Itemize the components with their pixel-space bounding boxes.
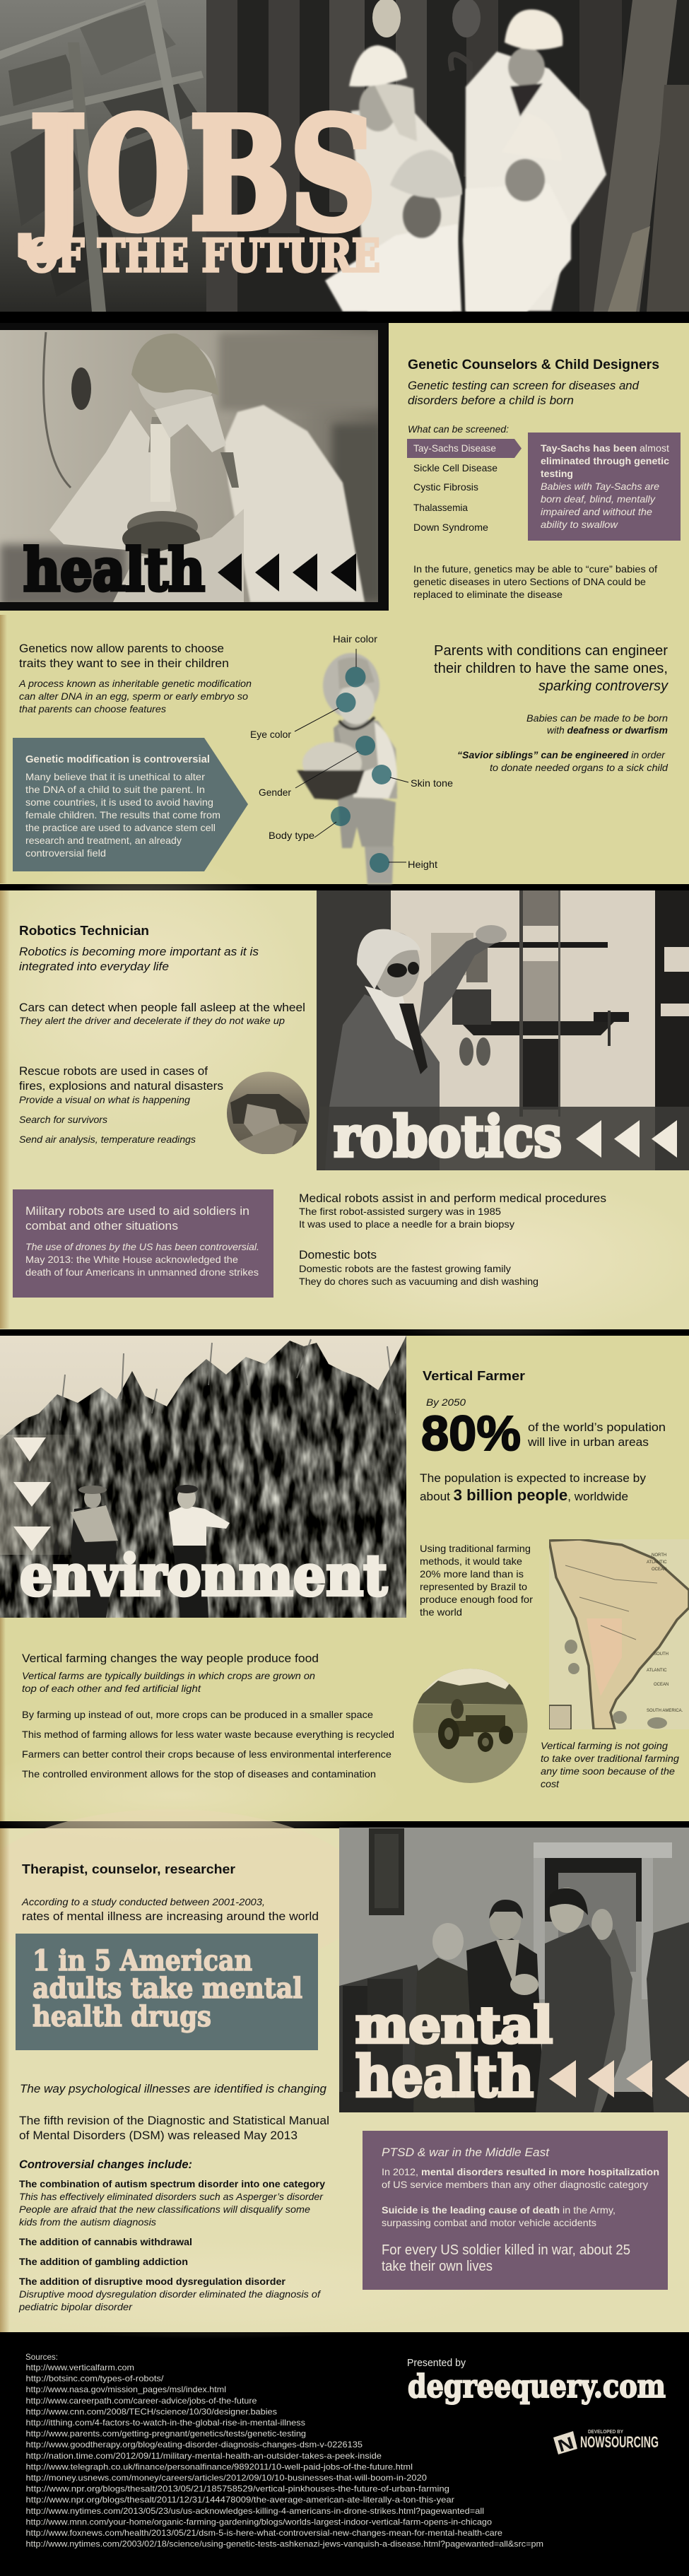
text block: cars: Cars can detect when people fall asleep at the wheel [19, 1001, 305, 1014]
trait labels [250, 633, 453, 870]
logo: nowsourcing [553, 2428, 659, 2457]
panel: PTSD and war: PTSD & war in the Middle East [382, 2146, 550, 2159]
text block: DSM changes: pediatric bipolar disorder [18, 2301, 133, 2312]
icon: N badge: N [555, 2433, 576, 2457]
text block: vertical farming changes: By farming up instead of out, more crops can be produced in a smaller space [22, 1709, 373, 1720]
text block: DSM changes: of Mental Disorders (DSM) was released May 2013 [19, 2129, 298, 2142]
map: south america [549, 1539, 689, 1729]
text block: traditional farming: methods, it would take [420, 1555, 522, 1567]
panel: tay-sachs callout: testing [541, 468, 573, 479]
text block: medical and domestic robots: Medical robots assist in and perform medical procedures [299, 1192, 606, 1205]
man front right [461, 158, 572, 312]
stat: 80 percent: of the world’s population [528, 1421, 666, 1434]
panel: 1 in 5 stat: adults take mental [33, 1972, 302, 2005]
text block: DSM changes: This has effectively eliminated disorders such as Asperger’s disorder [19, 2191, 324, 2202]
text block: choose traits: A process known as inheritable genetic modification [18, 678, 252, 689]
text block: DSM changes: The addition of disruptive mood dysregulation disorder [19, 2276, 286, 2287]
list: screened diseases [407, 439, 522, 533]
panel: military robots: The use of drones by the US has been controversial. [25, 1241, 259, 1252]
man front left [325, 150, 462, 312]
sources list: http://itthing.com/4-factors-to-watch-in-the-global-rise-in-mental-illness [25, 2418, 305, 2428]
panel: PTSD and war: For every US soldier killed in war, about 25 [382, 2242, 630, 2258]
text block: traditional farming [420, 1543, 533, 1618]
sources list: http://www.foxnews.com/health/2013/05/21/dsm-5-is-here-what-controversial-new-changes-mean-for-mental-health-care [25, 2528, 502, 2538]
text block: genetic counselors [408, 358, 659, 435]
sources list: http://www.verticalfarm.com [25, 2363, 134, 2372]
panel: genetic modification is controversial: Many believe that it is unethical to alter [25, 771, 205, 782]
paper: section backgrounds [0, 323, 689, 2339]
text block: DSM changes: Disruptive mood dysregulation disorder eliminated the diagnosis of [19, 2288, 322, 2300]
text block: rescue robots: fires, explosions and natural disasters [19, 1079, 223, 1093]
text block: traditional farming: the world [420, 1606, 462, 1618]
sources list: http://www.nytimes.com/2003/02/18/science/using-genetic-tests-ashkenazi-jews-vanquish-a-disease.html?pagewanted=all&src=pm [25, 2539, 543, 2549]
panel: genetic modification is controversial: controversial field [25, 847, 106, 859]
icon: down arrowheads [13, 1437, 51, 1551]
text block: not going to take over: to take over traditional farming [541, 1753, 679, 1764]
text block: genetic counselors: Genetic testing can screen for diseases and [408, 380, 640, 392]
sources list: http://www.careerpath.com/career-advice/jobs-of-the-future [25, 2396, 257, 2406]
text block: choose traits: can alter DNA in an egg, sperm or early embryo so [19, 690, 248, 702]
man at machine [325, 925, 507, 1170]
text block: medical and domestic robots: The first robot-assisted surgery was in 1985 [299, 1206, 501, 1217]
sources list: http://www.cnn.com/2008/TECH/science/10/30/designer.babies [25, 2406, 277, 2416]
leader lines [295, 649, 408, 862]
text block: DSM changes: People are afraid that the new classifications will disqualify some [19, 2204, 310, 2215]
panel: health photo [0, 323, 389, 611]
text block: vertical farming changes: The controlled environment allows for the stop of diseases and contamination [22, 1768, 376, 1780]
panel: PTSD and war: of US service members than any other diagnostic category [382, 2179, 648, 2190]
trait labels: Gender [259, 787, 291, 798]
text block: vertical farmer: Vertical Farmer [423, 1368, 525, 1383]
text block: genetic counselors: What can be screened: [408, 423, 509, 435]
trait labels: Height [408, 859, 437, 870]
photo: child [297, 653, 397, 884]
text block: rescue robots [19, 1064, 223, 1145]
sources list: http://money.usnews.com/money/careers/articles/2012/09/10/10-businesses-that-will-boom-in-2020 [25, 2473, 427, 2483]
text block: DSM changes: Controversial changes include: [19, 2158, 192, 2171]
text block: therapist: rates of mental illness are increasing around the world [22, 1910, 319, 1923]
text block: cars: They alert the driver and decelerate if they do not wake up [19, 1015, 285, 1026]
panel: environment photo of corn field [0, 1336, 406, 1618]
text block: parents with conditions [434, 643, 669, 773]
text block: vertical farming changes: top of each other and fed artificial light [22, 1683, 201, 1694]
map: south america: OCEAN [654, 1683, 669, 1687]
text block: not going to take over: any time soon because of the [541, 1765, 675, 1777]
farmer left [71, 1486, 118, 1618]
map: south america: OCEAN [652, 1568, 666, 1572]
panel: PTSD and war: In 2012, mental disorders resulted in more hospitalization [382, 2166, 659, 2177]
sources list: http://www.npr.org/blogs/thesalt/2013/05/21/185758529/vertical-pinkhouses-the-future-of-urban-farming [25, 2484, 449, 2494]
panel: genetic modification is controversial [13, 738, 248, 871]
text block: population increase: about 3 billion people, worldwide [420, 1486, 628, 1504]
panel: genetic modification is controversial: Genetic modification is controversial [25, 754, 210, 765]
sources list: http://www.nytimes.com/2013/05/23/us/us-acknowledges-killing-4-americans-in-drone-strikes.html?pagewanted=all [25, 2506, 484, 2516]
text block: DSM changes [18, 2114, 329, 2312]
text block: therapist: Therapist, counselor, researcher [22, 1862, 235, 1876]
panel: tay-sachs callout: born deaf, blind, mentally [541, 493, 656, 505]
text block: medical and domestic robots: It was used to place a needle for a brain biopsy [299, 1218, 514, 1230]
text block: future cure: In the future, genetics may be able to “cure” babies of [413, 563, 657, 575]
heading band: robotics [320, 1103, 689, 1170]
coat [224, 405, 365, 602]
sources list: http://botsinc.com/types-of-robots/ [25, 2374, 164, 2384]
panel: PTSD and war: take their own lives [382, 2259, 493, 2274]
text block: DSM changes: The combination of autism spectrum disorder into one category [19, 2178, 325, 2189]
text block: traditional farming: 20% more land than is [420, 1568, 524, 1580]
text block: not going to take over: cost [541, 1778, 560, 1789]
text block: rescue robots: Provide a visual on what is happening [19, 1094, 190, 1105]
panel: genetic modification is controversial: some countries, it is used to avoid having [25, 796, 213, 808]
trait labels: Hair color [333, 633, 377, 645]
text block: robotics technician: integrated into everyday life [19, 960, 169, 973]
text block: future cure: genetic diseases in utero Sections of DNA could be [413, 576, 646, 587]
panel: 1 in 5 stat [16, 1934, 318, 2050]
man back left [349, 45, 461, 311]
panel: genetic modification is controversial: research and treatment, an already [25, 835, 182, 846]
text block: medical and domestic robots: They do chores such as vacuuming and dish washing [299, 1276, 538, 1287]
panel: PTSD and war: surpassing combat and motor vehicle accidents [382, 2217, 596, 2228]
map: south america: ATLANTIC [647, 1560, 667, 1565]
sources list: http://www.npr.org/blogs/thesalt/2011/12/31/144478009/the-average-american-ate-literally-a-ton-this-year [25, 2495, 454, 2505]
text block: vertical farming changes: Vertical farms are typically buildings in which crops are grown on [22, 1670, 315, 1681]
text block: illnesses identified: The way psychological illnesses are identified is changing [20, 2082, 327, 2095]
text block: choose traits: that parents can choose features [19, 703, 166, 714]
stat: 80 percent: will live in urban areas [527, 1435, 649, 1449]
heading: mental health: mental [355, 1996, 553, 2054]
panel: tay-sachs callout [528, 433, 681, 541]
text block: parents with conditions: “Savior siblings” can be engineered in order [457, 749, 666, 760]
text block: future cure [413, 563, 657, 600]
panel: military robots [13, 1189, 273, 1298]
list: screened diseases: Cystic Fibrosis [413, 481, 478, 493]
text block: traditional farming: represented by Brazil to [420, 1581, 527, 1592]
text block: parents with conditions: Babies can be made to be born [526, 712, 668, 724]
text block: parents with conditions: Parents with conditions can engineer [434, 643, 668, 659]
text block: vertical farming changes: This method of farming allows for less water waste because everything is recycled [22, 1729, 394, 1740]
text block: robotics technician [19, 923, 259, 973]
text block: parents with conditions: to donate needed organs to a sick child [490, 762, 669, 773]
man back right [466, 9, 606, 311]
text block: future cure: replaced to eliminate the disease [413, 589, 563, 600]
panel: PTSD and war: Suicide is the leading cause of death in the Army, [382, 2204, 616, 2216]
sources list: http://www.telegraph.co.uk/finance/personalfinance/9892011/10-well-paid-jobs-of-the-future.html [25, 2462, 413, 2471]
text block: robotics technician: Robotics is becoming more important as it is [19, 946, 259, 958]
selected disease tab [407, 439, 522, 458]
text block: choose traits [18, 642, 252, 714]
text block: DSM changes: The addition of cannabis withdrawal [19, 2236, 192, 2247]
farmer right [169, 1485, 230, 1618]
text block: choose traits: Genetics now allow parents to choose [19, 642, 224, 655]
icon: N badge [553, 2431, 577, 2457]
heading band: robotics: robotics [334, 1103, 562, 1170]
text block: rescue robots: Search for survivors [19, 1114, 107, 1125]
text block: genetic counselors: disorders before a child is born [408, 394, 574, 407]
sources list: http://nation.time.com/2012/09/11/military-mental-health-an-outsider-takes-a-peek-inside [25, 2451, 382, 2461]
heading: mental health: health [355, 2043, 534, 2110]
panel: tay-sachs callout: ability to swallow [541, 519, 618, 530]
panel: genetic modification is controversial: the DNA of a child to suit the parent. In [25, 784, 205, 795]
trait labels: Body type [269, 830, 314, 841]
heading: health: health [23, 536, 205, 604]
heading: mental health [355, 1996, 689, 2110]
heading: environment: environment [20, 1542, 387, 1608]
logo: nowsourcing: DEVELOPED BY [588, 2428, 623, 2435]
trait markers [331, 667, 391, 873]
title: OF THE FUTURE [25, 230, 380, 283]
panel: genetic modification is controversial: female children. The results that come from [25, 809, 220, 821]
map: south america: SOUTH AMERICA. [647, 1709, 683, 1713]
icon: arrowheads [218, 553, 356, 592]
sources list: http://www.mnn.com/your-home/organic-farming-gardening/blogs/worlds-largest-indoor-vertical-farm-opens-in-chicago [25, 2517, 492, 2527]
map: south america: SOUTH [654, 1652, 669, 1657]
presented by: degreequery.com: Presented by [407, 2358, 466, 2369]
panel: genetic modification is controversial: the practice are used to advance stem cell [25, 822, 216, 833]
sources list [25, 2352, 543, 2549]
text block: population increase [420, 1471, 646, 1504]
text block: DSM changes: kids from the autism diagnosis [19, 2216, 156, 2228]
guests [413, 1888, 689, 2112]
text block: vertical farming changes: Farmers can better control their crops because of less environmental interference [22, 1748, 391, 1760]
map: south america: ATLANTIC [647, 1669, 667, 1673]
panel: 1 in 5 stat: health drugs [33, 2000, 211, 2033]
child figure with trait markers [250, 633, 453, 884]
header photo: engineers in hard hats [0, 0, 689, 312]
text block: parents with conditions: sparking controversy [538, 678, 669, 694]
text block: DSM changes: The fifth revision of the Diagnostic and Statistical Manual [19, 2114, 329, 2127]
text block: medical and domestic robots: Domestic robots are the fastest growing family [299, 1263, 511, 1274]
trait labels: Skin tone [411, 777, 453, 789]
panel: tay-sachs callout: eliminated through genetic [541, 455, 669, 466]
photo circle: tractor [413, 1669, 528, 1784]
text block: medical and domestic robots [299, 1192, 606, 1287]
panel: military robots: Military robots are used to aid soldiers in [25, 1204, 249, 1218]
icon: arrowheads [549, 2060, 689, 2098]
text block: not going to take over: Vertical farming is not going [541, 1740, 668, 1751]
panel: tay-sachs callout: impaired and without the [541, 506, 652, 517]
text block: traditional farming: produce enough food for [420, 1594, 533, 1605]
stat: 80 percent: 80% [421, 1406, 521, 1461]
list: screened diseases: Down Syndrome [413, 522, 488, 533]
list: screened diseases: Thalassemia [413, 502, 468, 513]
text block: not going to take over [541, 1740, 679, 1789]
text block: robotics technician: Robotics Technician [19, 923, 149, 938]
trait labels: Eye color [250, 729, 291, 740]
sources list: http://www.parents.com/getting-pregnant/genetics/tests/genetic-testing [25, 2429, 306, 2439]
text block: DSM changes: The addition of gambling addiction [19, 2256, 188, 2267]
text block: population increase: The population is expected to increase by [420, 1471, 646, 1485]
panel: 1 in 5 stat: 1 in 5 American [33, 1944, 252, 1977]
text block: choose traits: traits they want to see in their children [19, 657, 229, 670]
text block: therapist: According to a study conducted between 2001-2003, [21, 1896, 265, 1907]
panel: military robots: combat and other situations [25, 1219, 178, 1233]
map: south america: NORTH [652, 1553, 666, 1558]
text block: rescue robots: Rescue robots are used in cases of [19, 1064, 208, 1078]
heading: environment [13, 1437, 387, 1608]
text block: therapist [21, 1862, 319, 1923]
text block: genetic counselors: Genetic Counselors & Child Designers [408, 358, 659, 372]
text block: vertical farmer [423, 1368, 525, 1408]
sources list: Sources: [25, 2352, 58, 2362]
text block: traditional farming: Using traditional farming [420, 1543, 531, 1554]
text block: vertical farmer: By 2050 [426, 1396, 466, 1408]
icon: top shackle [372, 0, 481, 177]
stat: 80 percent [421, 1406, 666, 1461]
microscope stand [49, 410, 177, 551]
title: JOBS [21, 84, 376, 264]
text block: vertical farming changes: Vertical farming changes the way people produce food [22, 1652, 319, 1665]
text block: cars [19, 1001, 305, 1026]
panel: PTSD and war [363, 2131, 668, 2290]
icon: arrowheads [576, 1120, 677, 1158]
text block: parents with conditions: with deafness or dwarfism [547, 724, 668, 736]
panel: mental health photo [339, 1828, 689, 2112]
panel: military robots: May 2013: the White House acknowledged the [25, 1254, 238, 1265]
photo circle: disaster wreckage [227, 1071, 310, 1154]
text block: vertical farming changes [22, 1652, 394, 1780]
text block: rescue robots: Send air analysis, temperature readings [19, 1134, 196, 1145]
sources list: http://www.goodtherapy.org/blog/eating-disorder-diagnosis-changes-dsm-v-0226135 [25, 2440, 363, 2449]
panel: tay-sachs callout: Tay-Sachs has been almost [541, 442, 669, 454]
panel: tay-sachs callout: Babies with Tay-Sachs are [541, 481, 659, 492]
heading: health [23, 536, 356, 604]
text block: parents with conditions: their children to have the same ones, [434, 661, 668, 676]
sources list: http://www.nasa.gov/mission_pages/msl/index.html [25, 2384, 226, 2394]
list: screened diseases: Tay-Sachs Disease [413, 442, 496, 454]
text block: medical and domestic robots: Domestic bots [299, 1248, 377, 1261]
panel: robotics photo [317, 890, 689, 1170]
head [139, 348, 216, 409]
list: screened diseases: Sickle Cell Disease [413, 462, 497, 474]
panel: military robots: death of four Americans in unmanned drone strikes [25, 1266, 259, 1278]
